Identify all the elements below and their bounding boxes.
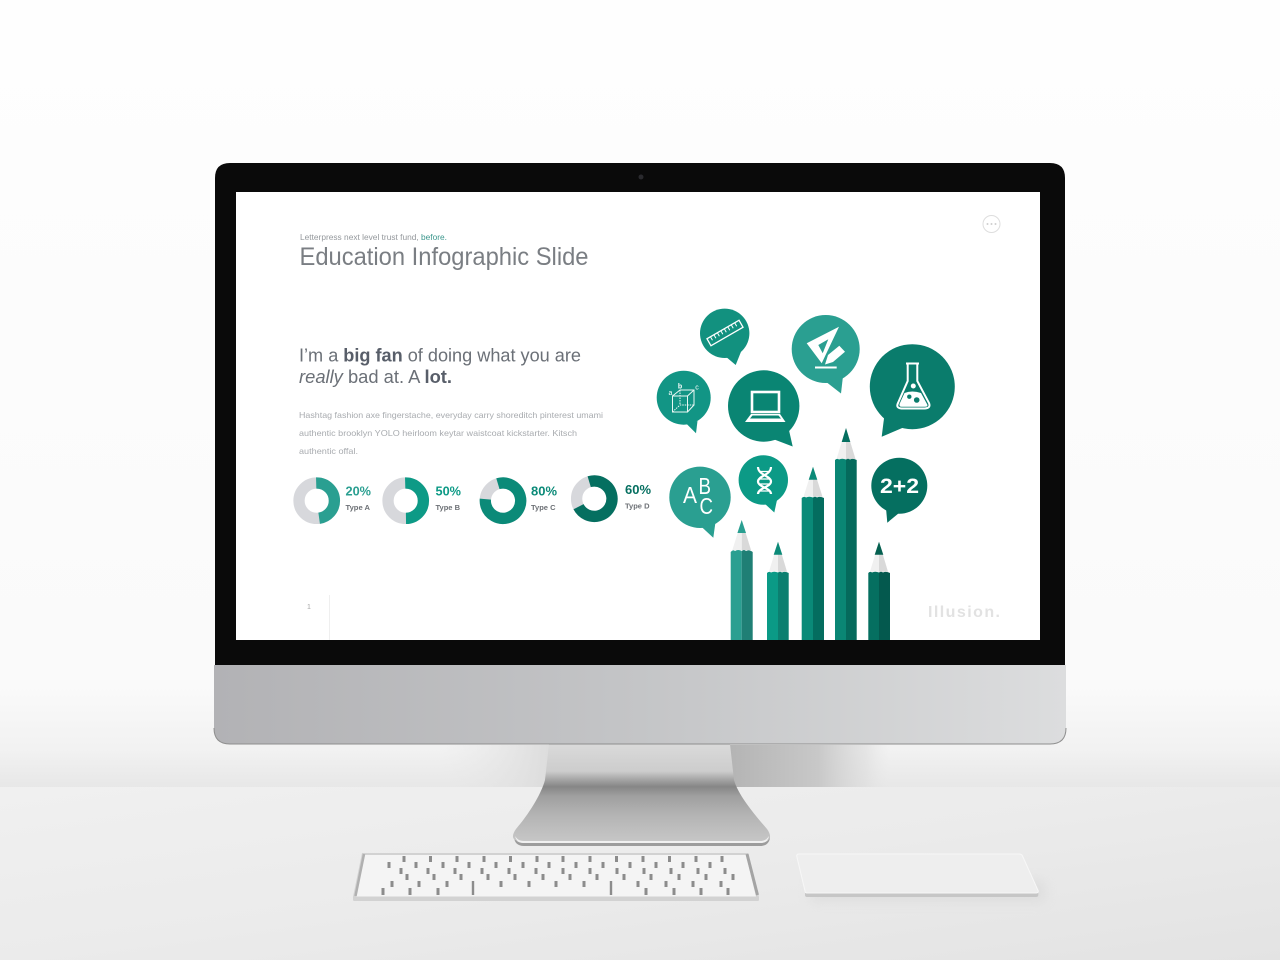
keyboard key gaps (383, 856, 733, 895)
pencil 4 (835, 428, 857, 640)
bubble: ruler (700, 309, 749, 365)
icon: DNA helix (758, 467, 771, 494)
menu dots icon (983, 216, 1000, 232)
bubble: 2+2 (871, 458, 927, 523)
monitor bezel (215, 163, 1065, 665)
icon: set square and pencil (807, 327, 845, 368)
icon: cube with labels (669, 384, 699, 412)
pencil 5 (868, 542, 890, 640)
title: Education Infographic Slide (300, 243, 588, 271)
monitor (214, 163, 1066, 744)
slide label: Letterpress next level trust fund, before. (300, 232, 447, 242)
bubble: cube (657, 371, 711, 433)
icon: cube with labels: a (669, 390, 673, 397)
monitor stand (513, 744, 770, 846)
donut chart: type A (299, 483, 371, 518)
bubble: DNA (739, 455, 788, 512)
headline: I’m a big fan of doing what you are (299, 346, 581, 366)
brand mark: Illusion. (928, 604, 1000, 621)
donut chart: type D: Type D (625, 504, 650, 510)
headline: really bad at. A lot. (299, 367, 452, 387)
monitor chin (214, 665, 1066, 744)
donut chart: type D (573, 477, 651, 520)
donut chart: type B: Type B (436, 505, 460, 512)
body text: authentic offal. (299, 446, 358, 456)
donut chart: type A: Type A (346, 505, 370, 512)
donut chart: type C (481, 479, 557, 522)
trackpad (797, 854, 1045, 902)
icon: letters ABC: A (683, 482, 698, 508)
pencil 3 (802, 467, 824, 640)
body text (299, 410, 603, 456)
icon: laptop (745, 392, 786, 422)
webcam (638, 174, 644, 180)
headline (299, 346, 581, 387)
monitor shadow on wall (440, 745, 890, 787)
icon: cube with labels: c (695, 384, 699, 392)
body text: authentic brooklyn YOLO heirloom keytar waistcoat kickstarter. Kitsch (299, 428, 577, 438)
body text: Hashtag fashion axe fingerstache, everyday carry shoreditch pinterest umami (299, 410, 603, 420)
keyboard (353, 853, 759, 901)
bubble: laptop (728, 370, 799, 446)
icon: flask (897, 362, 930, 408)
pencil 2 (767, 542, 789, 640)
icon: ruler (707, 320, 743, 346)
page number: 1 (307, 604, 311, 611)
icon: cube with labels: b (678, 384, 682, 390)
donut chart: type B: 50% (436, 484, 461, 498)
donut chart: type D: 60% (625, 483, 651, 497)
donut chart: type B (388, 483, 461, 518)
label: 2+2: 2+2 (880, 475, 919, 498)
bubble: ABC (669, 467, 731, 538)
donut chart: type C: Type C (531, 505, 556, 512)
bubble: flask (870, 344, 955, 437)
bubble: set square and pencil (792, 315, 860, 394)
icon: letters ABC: C (700, 493, 713, 519)
icon: letters ABC: B (698, 473, 711, 499)
pencil 1 (731, 520, 753, 640)
slide screen (236, 192, 1040, 640)
donut chart: type C: 80% (531, 484, 557, 498)
desk surface (0, 787, 1280, 960)
icon: letters ABC (683, 473, 713, 519)
donut chart: type A: 20% (346, 484, 371, 498)
